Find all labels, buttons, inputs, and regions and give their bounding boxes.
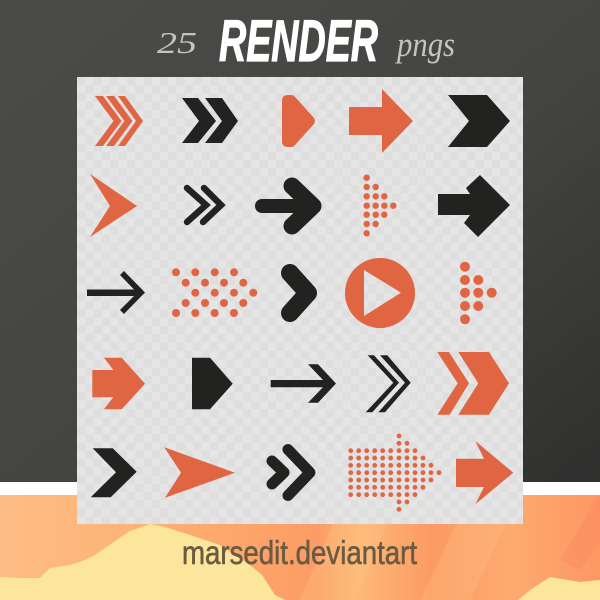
icon: black rounded double chevron bbox=[272, 450, 310, 496]
icon: orange swept arrow bbox=[456, 441, 513, 504]
white band bbox=[0, 482, 600, 495]
icon: orange dotted triangle small bbox=[364, 174, 396, 236]
icon: orange rounded tab arrow bbox=[287, 100, 310, 142]
icon: orange dart bbox=[90, 174, 137, 237]
title: RENDER: RENDER bbox=[219, 9, 378, 74]
orange watercolor background bbox=[0, 495, 600, 600]
credit: marsedit.deviantart: marsedit.deviantart bbox=[182, 534, 417, 571]
icon: orange dotted block arrow bbox=[351, 436, 439, 511]
icon: orange long dart bbox=[164, 447, 235, 498]
icon: black double chevron bbox=[182, 98, 238, 143]
icon: black chevron bbox=[91, 448, 137, 497]
icon: black slim arrow bbox=[271, 364, 336, 403]
title: 25: 25 bbox=[157, 25, 197, 60]
icon: black wide chevron bbox=[448, 95, 510, 147]
icon: black thin arrow bbox=[87, 271, 145, 314]
icon: orange chevron pair bbox=[437, 352, 509, 415]
icon: orange triple chevron bbox=[95, 96, 143, 146]
icon: black slim double chevron bbox=[366, 355, 411, 412]
torn yellow paper shapes bbox=[0, 524, 600, 600]
icon: orange dotted triangle large bbox=[460, 262, 497, 324]
icon: black thin rounded double chevron bbox=[187, 188, 221, 222]
icon: orange play button bbox=[345, 258, 415, 328]
panel: checkered arrows sheet bbox=[77, 77, 523, 524]
icon: orange block arrow bbox=[349, 89, 413, 153]
icon: black square-head arrow bbox=[438, 175, 510, 237]
icon: black tag shape bbox=[192, 358, 233, 409]
icon: orange notched arrow bbox=[92, 358, 145, 409]
icon: orange dotted arrow wide bbox=[172, 268, 257, 317]
icon: black rounded arrow bbox=[262, 186, 313, 226]
icon: black rounded chevron bbox=[290, 273, 308, 313]
title: pngs: pngs bbox=[394, 25, 455, 64]
